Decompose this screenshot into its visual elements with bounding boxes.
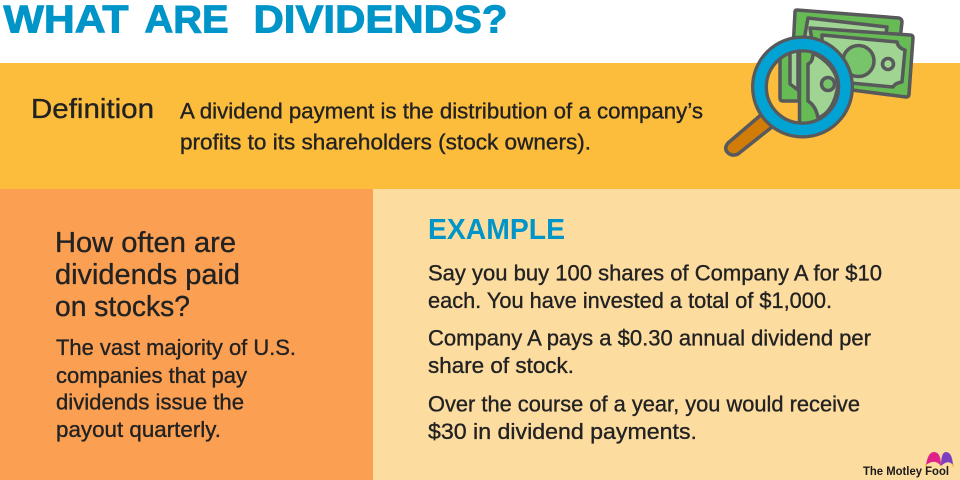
icon: front banknote — [810, 28, 913, 97]
text: example paragraph 1: Say you buy 100 shares of Company A for $10 — [428, 260, 882, 286]
heading: how often — [55, 227, 240, 323]
heading: how often: dividends paid — [55, 259, 240, 291]
icon: lens contents — [765, 50, 839, 124]
heading: definition: Definition — [31, 93, 154, 124]
panel: definition band — [0, 63, 960, 189]
text: logo wordmark: The Motley Fool — [863, 464, 949, 478]
icon: magnifying glass over money — [726, 10, 913, 155]
text: how often body — [56, 335, 296, 442]
panel: how often — [0, 189, 373, 480]
text: example paragraph 3: $30 in dividend payments. — [428, 419, 697, 444]
text: how often body: The vast majority of U.S. — [56, 335, 296, 360]
title — [4, 0, 508, 42]
text: example paragraph 3: Over the course of a year, you would receive — [428, 392, 860, 416]
text: example paragraph 2 — [428, 326, 871, 378]
icon: lens ring — [760, 44, 846, 130]
panel: example — [373, 189, 960, 480]
icon: back banknote — [793, 10, 902, 60]
heading: example: EXAMPLE — [428, 214, 565, 246]
text: example paragraph 2: share of stock. — [428, 353, 574, 378]
heading: how often: on stocks? — [55, 291, 190, 323]
icon: handle — [726, 114, 772, 155]
text: example paragraph 1 — [428, 260, 882, 313]
text: how often body: payout quarterly. — [56, 417, 221, 442]
text: example paragraph 2: Company A pays a $0.30 annual dividend per — [428, 326, 871, 350]
text: example paragraph 3 — [428, 392, 860, 444]
text: definition body: A dividend payment is the distribution of a company’s — [180, 98, 703, 124]
text: how often body: companies that pay — [56, 363, 247, 388]
text: how often body: dividends issue the — [56, 390, 244, 414]
heading: how often: How often are — [55, 227, 236, 259]
text: definition body: profits to its shareholders (stock owners). — [180, 130, 591, 154]
icon: jester hat — [925, 452, 954, 467]
text: example paragraph 1: each. You have invested a total of $1,000. — [428, 288, 832, 313]
text: definition body — [180, 98, 703, 154]
logo: The Motley Fool — [863, 452, 954, 478]
